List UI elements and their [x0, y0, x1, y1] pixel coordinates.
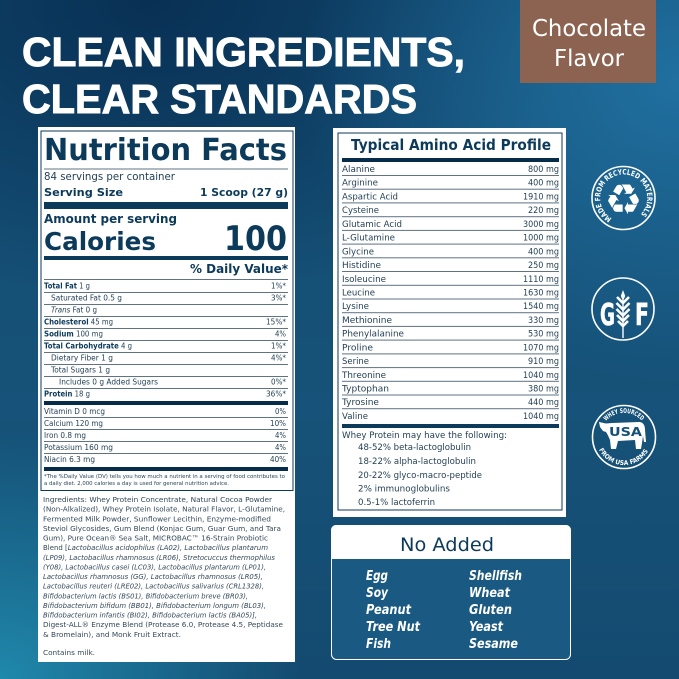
amino acid rows: 440 mg	[528, 398, 559, 408]
ingredients list: Blend [Lactobacillus acidophilus (LA02), Lactobacillus plantarum	[43, 543, 268, 552]
nutrient rows	[44, 279, 288, 464]
heading: no added: No Added	[400, 534, 494, 556]
allergen list left: Peanut	[366, 603, 412, 618]
amino acid rows: Typtophan	[341, 384, 389, 394]
icon: whey sourced from usa farms: FROM USA FARMS	[599, 448, 648, 466]
servings per container: 84 servings per container	[44, 171, 176, 183]
allergen list right: Sesame	[469, 637, 518, 652]
ingredients list: (Y08), Lactobacillus casei (LC03), Lactobacillus plantarum (LP01),	[43, 562, 266, 571]
ingredients list: (Non-Alkalized), Whey Protein Isolate, Natural Flavor, L-Glutamine,	[43, 505, 285, 514]
amino acid rows: 1910 mg	[523, 192, 559, 202]
amino acid rows: Glycine	[342, 247, 374, 257]
amino acid rows: Lysine	[342, 302, 369, 312]
ingredients list: Ingredients: Whey Protein Concentrate, Natural Cocoa Powder	[43, 495, 272, 504]
amino acid rows: 1040 mg	[523, 412, 559, 422]
ingredients list: Contains milk.	[43, 648, 95, 657]
amino acid rows: 380 mg	[528, 384, 559, 394]
amino acid rows: Cysteine	[342, 206, 379, 216]
allergen list right: Wheat	[469, 586, 511, 601]
amino acid rows: Isoleucine	[342, 275, 386, 285]
icon: gluten free: G	[600, 298, 615, 333]
amino acid rows: 1070 mg	[523, 343, 559, 353]
icon: gluten free	[592, 278, 654, 340]
amino acid rows: 1110 mg	[523, 275, 559, 285]
whey protein fractions: 0.5-1% lactoferrin	[358, 498, 435, 508]
ingredients list: Bifidobacterium infantis (BI02), Bifidobacterium lactis (BA05)],	[43, 610, 257, 620]
amino acid rows: Tyrosine	[341, 398, 379, 408]
whey protein fractions: Whey Protein may have the following:	[342, 431, 507, 441]
amino acid rows: Valine	[342, 412, 368, 422]
ingredients list: Bifidobacterium bifidum (BB01), Bifidobacterium longum (BL03),	[43, 601, 266, 610]
nutrient rows: Includes 0 g Added Sugars	[59, 378, 158, 386]
panel: no added allergens	[331, 525, 571, 660]
heading: nutrition facts: Nutrition Facts	[44, 133, 287, 168]
amino acid rows: 530 mg	[528, 330, 559, 340]
amino acid rows: Glutamic Acid	[342, 220, 402, 230]
amino acid rows: Methionine	[342, 316, 392, 326]
footnote: a daily diet. 2,000 calories a day is used for general nutrition advice.	[44, 481, 229, 487]
icon: made from recycled materials: ♻	[605, 175, 642, 224]
nutrient rows: 1%*	[271, 282, 286, 290]
title: CLEAN INGREDIENTS,	[22, 29, 465, 75]
amino acid rows: 800 mg	[528, 165, 559, 175]
flavor badge: Flavor	[554, 46, 625, 72]
ingredients list: Bifidobacterium lactis (BS01), Bifidobacterium breve (BR03),	[43, 591, 248, 600]
nutrient rows: Cholesterol 45 mg	[44, 318, 113, 326]
ingredients list: Steviol Glycosides, Gum Blend (Konjac Gum, Guar Gum, and Tara	[43, 524, 281, 533]
nutrient rows: Vitamin D 0 mcg	[44, 407, 105, 416]
ingredients list: Digest-ALL® Enzyme Blend (Protease 6.0, Protease 4.5, Peptidase	[43, 620, 284, 629]
amino acid rows: 1540 mg	[523, 302, 559, 312]
icon: made from recycled materials: MADE FROM RECYCLED MATERIALS	[594, 169, 653, 222]
nutrient rows: Niacin 6.3 mg	[44, 455, 95, 464]
amino acid rows: Histidine	[342, 261, 381, 271]
amino acid rows: Serine	[342, 357, 369, 367]
amino acid rows: 910 mg	[528, 357, 559, 367]
nutrient rows: 3%*	[271, 294, 286, 302]
flavor badge: Chocolate	[532, 16, 646, 42]
ingredients list: Lactobacillus reuteri (LRE02), Lactobacillus salivarius (CRL1328),	[43, 582, 264, 591]
footnote	[44, 474, 285, 487]
nutrient rows: 36%*	[266, 390, 286, 398]
ingredients list: Gum), Pure Ocean® Sea Salt, MICROBAC™ 16-Strain Probiotic	[43, 534, 268, 542]
allergen list left: Fish	[366, 637, 391, 652]
amino acid rows: L-Glutamine	[342, 234, 395, 244]
icon: gluten free: F	[635, 298, 649, 333]
nutrient rows: 40%	[270, 455, 286, 464]
footnote: *The %Daily Value (DV) tells you how much a nutrient in a serving of food contributes to	[44, 474, 285, 480]
title	[22, 29, 465, 122]
nutrient rows: Sodium 100 mg	[44, 330, 103, 338]
amino acid rows: Proline	[342, 343, 373, 353]
nutrient rows: 4%	[275, 330, 286, 338]
nutrient rows: Dietary Fiber 1 g	[51, 354, 113, 362]
whey protein fractions: 48-52% beta-lactoglobulin	[358, 443, 471, 453]
serving size: Serving Size	[44, 186, 123, 199]
calories: Calories	[44, 227, 156, 256]
nutrient rows: 0%	[275, 407, 286, 416]
nutrient rows: Total Carbohydrate 4 g	[44, 342, 132, 350]
amino acid rows: Leucine	[342, 288, 375, 298]
allergen list left	[366, 569, 421, 652]
amino acid rows: Phenylalanine	[342, 330, 404, 340]
icon: whey sourced from usa farms: WHEY SOURCED	[602, 408, 644, 420]
title: CLEAR STANDARDS	[22, 76, 417, 122]
icon: whey sourced from usa farms: USA	[609, 424, 642, 439]
nutrient rows: Calcium 120 mg	[44, 419, 103, 428]
amino acid rows: 1040 mg	[523, 371, 559, 381]
flavor badge	[520, 0, 656, 83]
nutrient rows: Potassium 160 mg	[44, 443, 113, 452]
amino acid rows: 330 mg	[528, 316, 559, 326]
ingredients list: Lactobacillus rhamnosus (GG), Lactobacillus rhamnosus (LR05),	[43, 572, 263, 581]
amino acid rows: Alanine	[342, 165, 375, 175]
panel: nutrition facts and ingredients	[38, 127, 295, 662]
amino acid rows: Threonine	[341, 371, 386, 381]
nutrient rows: 4%	[275, 443, 286, 452]
ingredients list	[43, 495, 285, 657]
amino acid rows: 1000 mg	[523, 234, 559, 244]
allergen list right: Shellfish	[469, 569, 522, 584]
panel: amino acid profile	[333, 128, 566, 517]
amino acid rows	[341, 165, 559, 422]
amino acid rows: Aspartic Acid	[342, 192, 398, 202]
calories: 100	[224, 219, 287, 259]
heading: typical amino acid profile: Typical Amino Acid Profile	[351, 136, 551, 154]
allergen list right: Gluten	[469, 603, 512, 618]
nutrient rows: 4%*	[271, 354, 286, 362]
nutrient rows: Iron 0.8 mg	[44, 431, 86, 440]
serving size	[44, 186, 288, 199]
nutrient rows: 10%	[270, 419, 286, 428]
amino acid rows: 1630 mg	[523, 288, 559, 298]
amino acid rows: Arginine	[342, 179, 378, 189]
nutrient rows: Trans Fat 0 g	[51, 306, 97, 314]
nutrient rows: Total Fat 1 g	[44, 282, 90, 290]
nutrient rows: 1%*	[271, 342, 286, 350]
nutrient rows: 0%*	[271, 378, 286, 386]
nutrient rows: Saturated Fat 0.5 g	[51, 294, 122, 302]
amino acid rows: 400 mg	[528, 247, 559, 257]
allergen list left: Tree Nut	[366, 620, 421, 635]
calories	[44, 219, 287, 259]
amino acid rows: 220 mg	[528, 206, 559, 216]
serving size: 1 Scoop (27 g)	[200, 186, 288, 199]
amino acid rows: 250 mg	[528, 261, 559, 271]
amount per serving: Amount per serving	[44, 212, 177, 226]
allergen list right	[469, 569, 522, 652]
amino acid rows: 400 mg	[528, 179, 559, 189]
nutrient rows: 15%*	[266, 318, 286, 326]
allergen list left: Soy	[366, 586, 388, 601]
allergen list left: Egg	[366, 569, 388, 584]
whey protein fractions: 18-22% alpha-lactoglobulin	[358, 457, 476, 467]
nutrient rows: 4%	[275, 431, 286, 440]
icon: whey sourced from usa farms	[592, 404, 656, 470]
ingredients list: Fermented Milk Powder, Sunflower Lecithin, Enzyme-modified	[43, 514, 271, 523]
whey protein fractions: 2% immunoglobulins	[358, 484, 451, 494]
amino acid rows: 3000 mg	[523, 220, 559, 230]
allergen list right: Yeast	[469, 620, 504, 635]
ingredients list: & Bromelain), and Monk Fruit Extract.	[43, 630, 181, 639]
ingredients list: (LP09), Lactobacillus rhamnosus (LR06), Stretocuccus thermophilus	[43, 553, 275, 562]
daily value heading: % Daily Value*	[190, 262, 289, 276]
nutrient rows: Total Sugars 1 g	[50, 366, 110, 374]
nutrient rows: Protein 18 g	[44, 390, 90, 398]
whey protein fractions	[342, 431, 507, 508]
whey protein fractions: 20-22% glyco-macro-peptide	[358, 471, 482, 481]
